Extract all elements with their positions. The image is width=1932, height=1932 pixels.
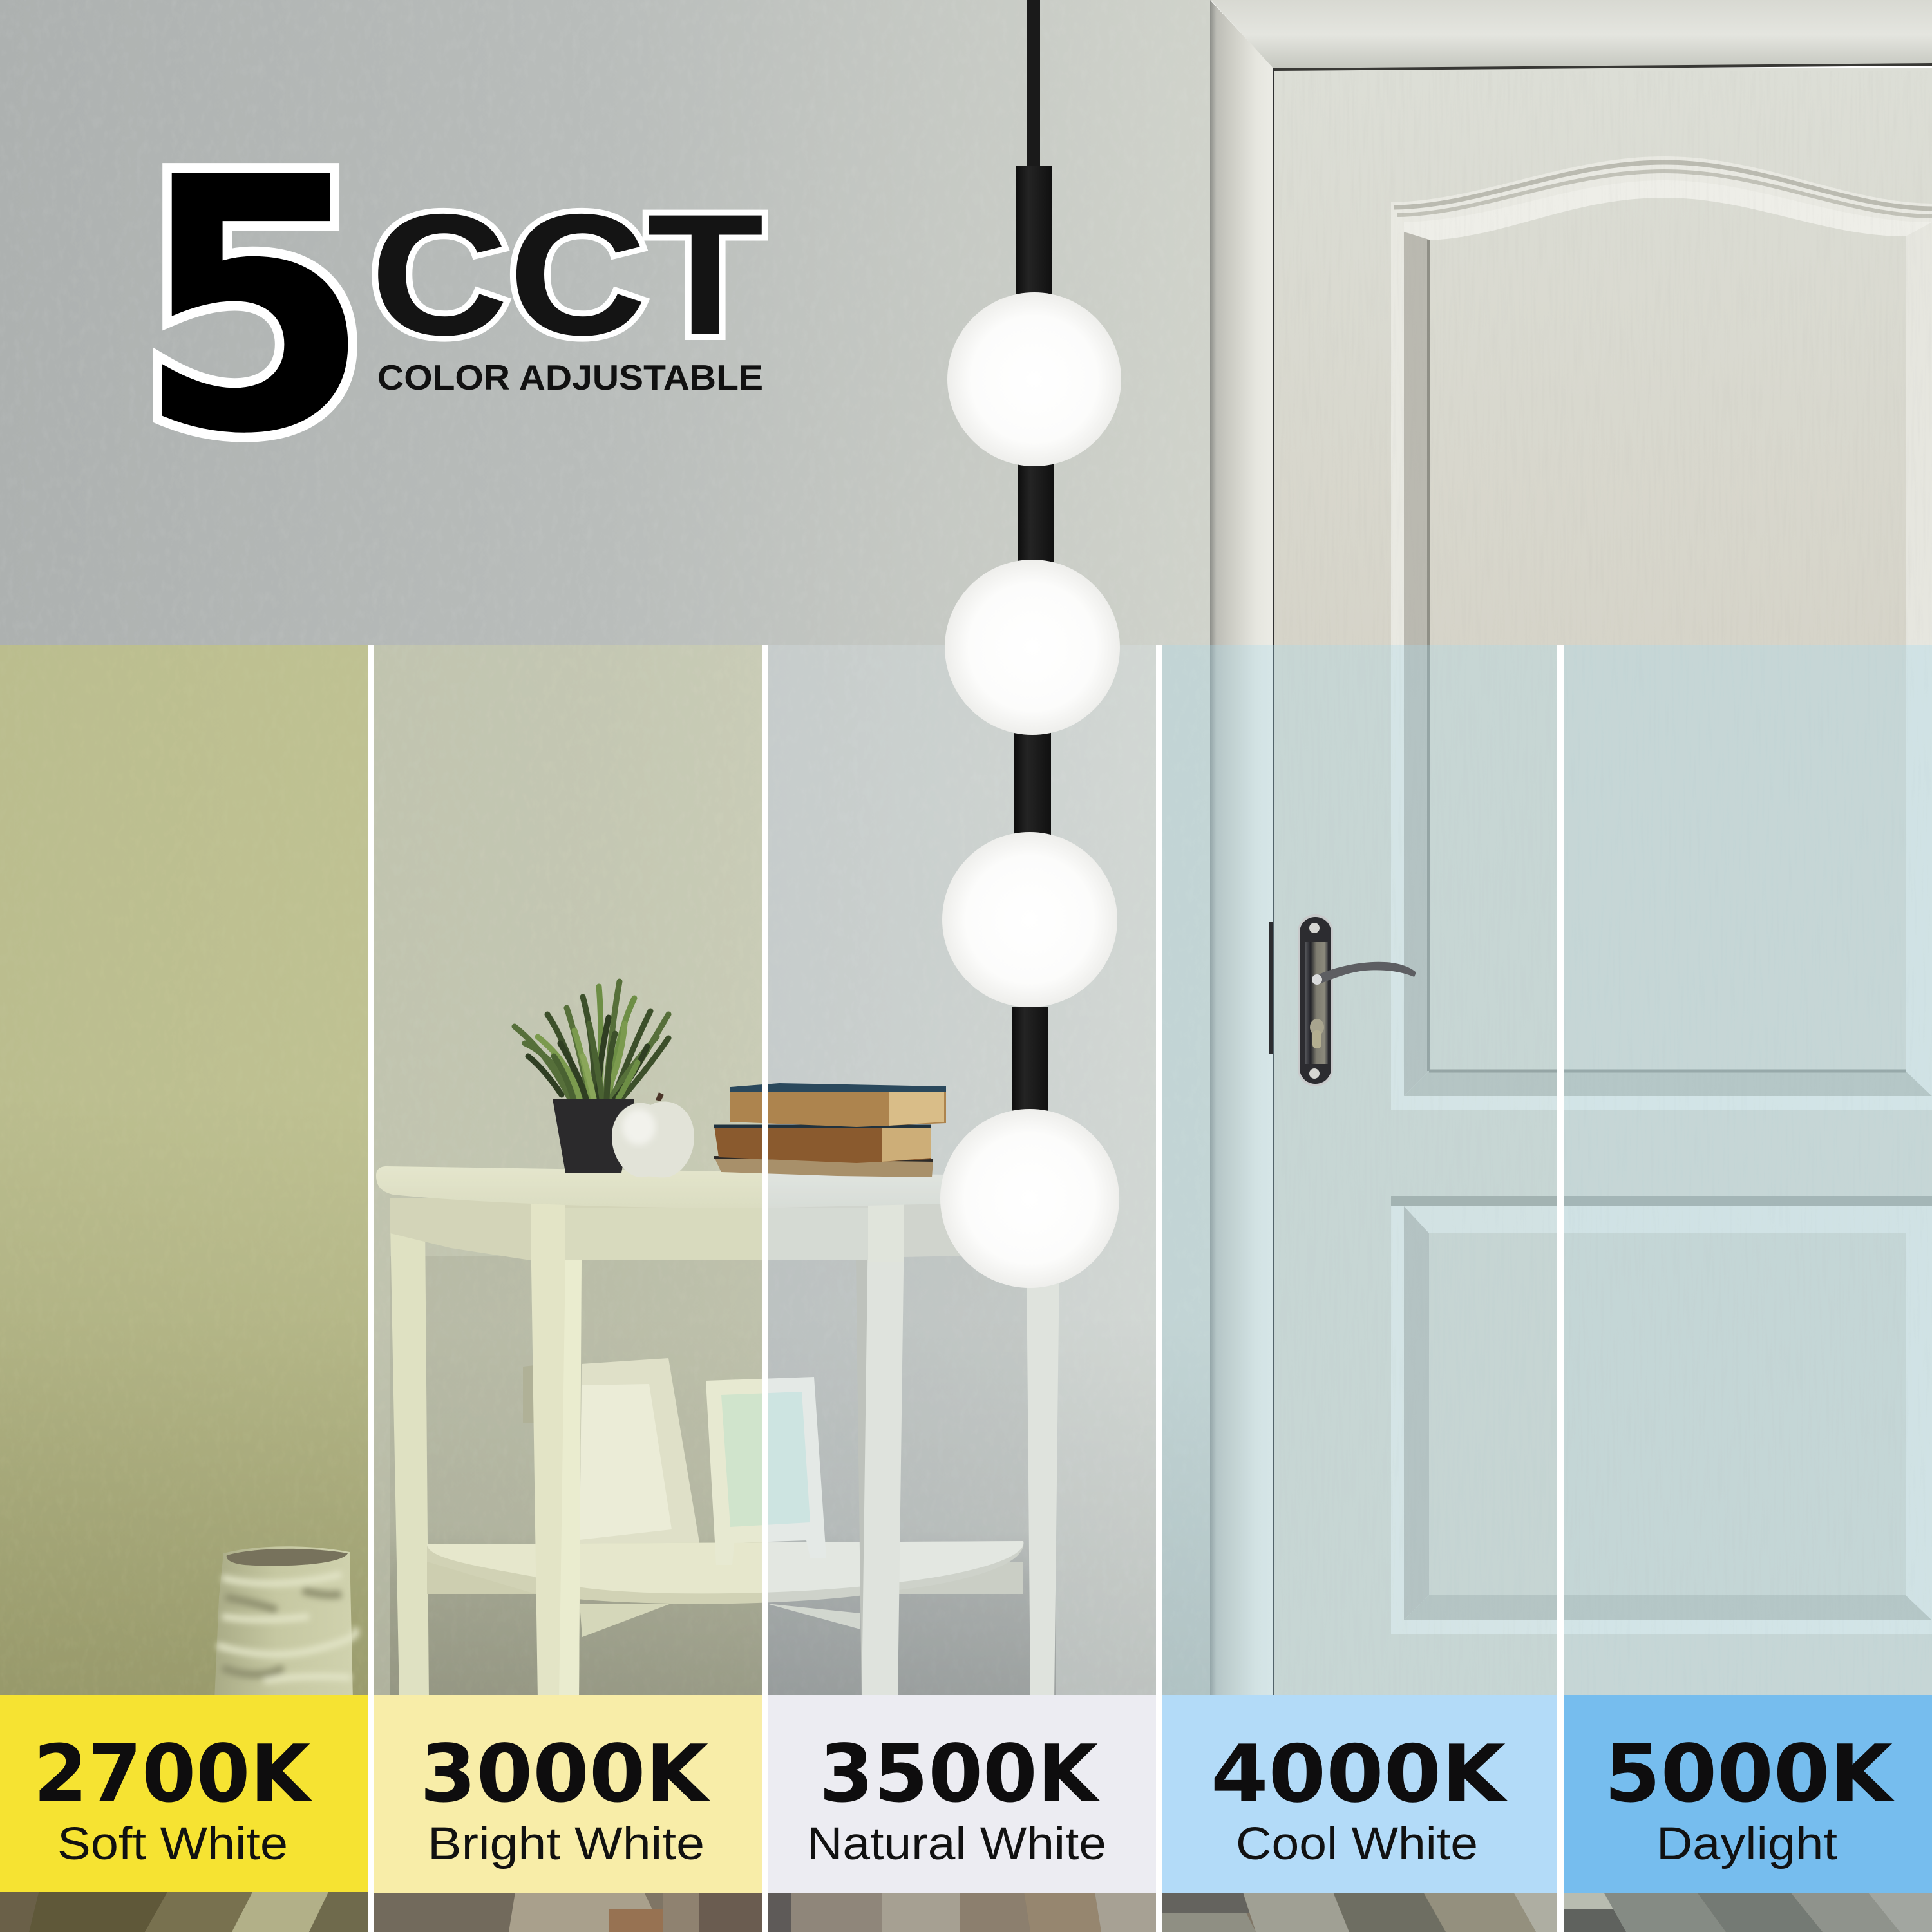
ceramic vase <box>214 1546 356 1700</box>
door head casing <box>1211 0 1932 70</box>
legend bar <box>0 1695 1932 1893</box>
legend: 2700K <box>0 1695 368 1892</box>
picture frame large <box>523 1358 701 1567</box>
headline: 5 CCT <box>136 104 764 511</box>
bottom book <box>714 1157 933 1177</box>
rear right leg <box>1027 1262 1059 1700</box>
potted plant <box>515 981 668 1173</box>
door slab <box>1274 68 1932 1893</box>
wall <box>0 0 1211 1932</box>
tint: 3500K <box>768 645 1156 1932</box>
middle book <box>714 1126 931 1163</box>
tint: 4000K <box>1162 645 1557 1932</box>
lower raised panel <box>1391 1196 1932 1634</box>
picture frame small <box>706 1377 826 1565</box>
legend: 3500K: Natural White <box>807 1819 1106 1870</box>
white column dividers <box>368 645 1564 1932</box>
shelf back rail <box>427 1562 1023 1594</box>
upper raised panel <box>1391 156 1932 1110</box>
door wood grain <box>1274 71 1932 1893</box>
globe 2 <box>945 560 1120 735</box>
front left leg <box>531 1224 582 1700</box>
front right leg <box>856 1224 904 1700</box>
connector 2 <box>1018 462 1054 565</box>
globe 4 <box>940 1109 1119 1288</box>
big numeral 5: 5 <box>136 104 372 511</box>
canopy <box>1016 166 1052 294</box>
door gap shadow <box>1274 64 1932 70</box>
rear left leg <box>390 1224 429 1700</box>
globe 1 <box>947 292 1121 466</box>
apron <box>390 1198 963 1260</box>
table top <box>376 1166 947 1208</box>
leaves <box>515 981 668 1099</box>
tint: 3000K <box>374 645 762 1932</box>
subtitle: COLOR ADJUSTABLE <box>377 357 763 397</box>
pendant lamp <box>940 0 1121 1288</box>
tint: 2700K <box>0 645 368 1932</box>
legend: 5000K: 5000K <box>1604 1728 1896 1821</box>
legend: 4000K: Cool White <box>1236 1819 1478 1870</box>
door <box>1273 64 1932 1893</box>
legend: 3000K: 3000K <box>420 1728 712 1821</box>
CCT: CCT <box>370 178 764 371</box>
legend: 3500K <box>768 1695 1156 1893</box>
legend: 3000K: Bright White <box>428 1819 705 1870</box>
legend: 5000K: Daylight <box>1656 1819 1837 1870</box>
globe 3 <box>942 832 1117 1007</box>
legend: 2700K: Soft White <box>57 1819 288 1870</box>
connector 3 <box>1014 732 1051 835</box>
lower shelf <box>427 1541 1023 1637</box>
ceramic apple <box>612 1092 694 1177</box>
legend: 5000K <box>1564 1695 1932 1893</box>
connector 4 <box>1012 1007 1048 1111</box>
shadow on wall under table <box>390 1256 1056 1700</box>
door handle <box>1269 914 1416 1086</box>
top book <box>730 1083 946 1127</box>
door casing left <box>1210 0 1274 1893</box>
legend: 4000K: 4000K <box>1211 1728 1509 1821</box>
legend: 3000K <box>374 1695 762 1893</box>
legend: 3500K: 3500K <box>819 1728 1101 1821</box>
legend: 4000K <box>1162 1695 1557 1893</box>
stack of books <box>714 1083 946 1177</box>
half-moon console table <box>376 1166 1059 1700</box>
tint: 5000K <box>1564 645 1932 1932</box>
pot <box>553 1099 634 1173</box>
wooden floor <box>0 1892 1932 1932</box>
colour temperature tint overlays <box>0 645 1932 1932</box>
legend: 2700K: 2700K <box>33 1728 314 1821</box>
cord <box>1027 0 1040 167</box>
